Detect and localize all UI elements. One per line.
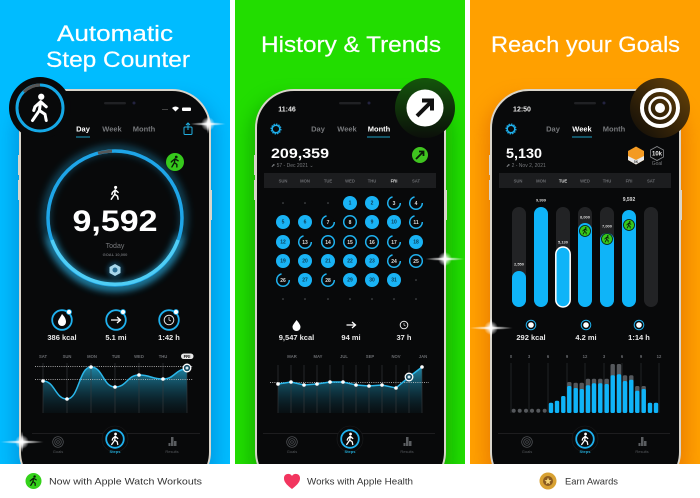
weekday header: WED [345,178,355,184]
calendar grid: 14 [325,240,331,246]
line chart: daily steps [35,363,193,413]
tab bar: Goals [287,449,297,454]
calendar grid: 24 [391,259,397,265]
tabs [76,126,155,138]
stat: distance: 5.1 mi [105,333,127,342]
month labels: JAN [419,354,427,359]
calendar grid: 23 [369,258,375,264]
weekday header: THU [368,178,376,184]
stat: distance [575,320,597,342]
bar chart: weekly steps: 2,550 [514,262,525,266]
tab bar: Steps [345,449,356,454]
panel: reach your goals [469,0,700,498]
calendar grid: 4 [415,201,418,207]
weekday header: MON [536,178,546,184]
hour labels: 3 [603,354,606,359]
stat: distance: 94 mi [341,333,361,342]
panel: automatic step counter [0,0,230,498]
bar chart: weekly steps: 8,000 [580,214,591,220]
tabs: Month [603,124,626,134]
tab bar: Steps [110,449,121,454]
clock: 12:50 [513,106,531,114]
stat: time: 1:14 h [628,333,650,342]
title: history and trends: History & Trends [261,32,441,57]
title: reach your goals: Reach your Goals [491,32,680,57]
icon: settings gear [506,124,516,134]
month labels [288,355,427,358]
weekday labels [39,354,194,359]
phone screen: week view [489,90,682,490]
icon: walker [111,186,118,199]
icon: settings gear [271,124,281,134]
month labels: MAR [287,354,297,359]
stat: time: 1:42 h [158,333,180,342]
hour labels: 6 [547,354,550,359]
hour labels: 9 [640,354,643,359]
weekday header: TUE [324,178,332,184]
weekday labels: THU [159,354,167,359]
stat: distance: 4.2 mi [575,333,597,342]
bar chart: weekly steps [512,197,658,307]
month labels: MAY [314,354,323,359]
month labels: JUL [340,354,348,359]
tabs: Day [76,124,91,134]
progress ring [46,149,184,287]
weekday labels: SUN [63,354,71,359]
month labels: SEP [366,354,374,359]
badge: walker [9,77,66,132]
tab bar [263,426,435,454]
stat: calories: 9,547 kcal [279,333,314,342]
stat: time [396,320,411,340]
caption: earn awards [540,472,618,490]
icon: green arrow [412,147,428,163]
calendar grid: 21 [325,258,331,264]
weekday header: MON [300,178,310,184]
stat: distance [341,322,361,342]
calendar grid: 10 [391,220,397,226]
sparkle right [425,248,465,270]
calendar grid: 1 [349,200,352,206]
calendar grid: 6 [304,220,307,226]
tabs: Day [311,124,326,134]
bar chart: weekly steps: 9,999 [536,198,547,202]
calendar grid: 15 [347,240,353,246]
panel: history and trends [235,0,465,498]
tab bar [32,426,200,454]
calendar grid: 25 [413,259,419,265]
month labels: NOV [391,354,401,359]
icon: 10k goal hexagon: Goal [652,161,662,167]
badge: arrow [395,78,455,138]
icon: 10k goal hexagon: 10k [652,152,663,158]
tabs [546,124,626,138]
badge: target [630,78,690,138]
phone screen: month view [254,90,447,490]
hour labels: 6 [621,354,624,359]
stat: calories: 386 kcal [47,333,77,342]
hour labels: 3 [528,354,531,359]
stat: calories [47,310,77,342]
calendar grid: 19 [280,258,286,264]
sparkle top right [190,116,226,134]
tab bar: Goals [522,449,532,454]
stat: calories: 292 kcal [516,333,546,342]
weekday labels: WED [134,354,144,359]
icon: 5k award hexagon [628,146,644,164]
calendar grid: 9 [371,220,374,226]
calendar grid: 13 [302,240,308,246]
calendar grid: 17 [391,240,397,246]
hour labels: 12 [583,354,588,359]
stat: calories [279,320,314,342]
weekday header: FRI [391,178,397,184]
title: automatic step counter [46,21,190,72]
calendar grid: 30 [369,278,375,284]
calendar grid: 11 [413,220,419,226]
weekday header: SUN [514,178,522,184]
calendar grid: 8 [349,220,352,226]
calendar grid: 28 [325,278,331,284]
icon: 5k award hexagon: 5K [634,160,639,164]
bar chart: weekly steps: 5,130 [558,240,569,244]
weekday header: SAT [412,178,420,184]
tab bar: Results [165,449,179,454]
tabs: Month [133,124,156,134]
tab bar: Goals [53,449,63,454]
weekday header [264,173,436,188]
hour labels: 0 [510,354,513,359]
tab bar [498,426,670,454]
calendar grid: 16 [369,240,375,246]
tabs [312,126,390,138]
caption: apple health [284,474,413,489]
hour labels [510,354,662,359]
weekday header: WED [580,178,590,184]
tab bar: Steps [580,449,591,454]
calendar grid: 27 [302,278,308,284]
icon: 10k goal hexagon [650,146,664,167]
tabs: Month [368,124,391,134]
weekday header: THU [603,178,611,184]
icon: share [184,123,192,134]
stat: calories [516,320,546,342]
status icons [162,106,191,112]
step count: 9,592 [72,205,158,238]
tab bar: Results [400,449,414,454]
weekday labels: MON [87,354,97,359]
icon: green runner [166,153,184,171]
bar chart: weekly steps: 9,592 [623,197,635,203]
weekday labels: TUE [112,354,120,359]
weekday labels: SAT [39,354,47,359]
hour labels: 9 [566,354,569,359]
stat: time: 37 h [396,333,412,342]
title: automatic step counter: Step Counter [46,47,190,72]
weekday labels: FRI [184,354,190,359]
icon: badge hexagon [107,262,123,278]
total steps: 209,359 [271,145,329,161]
weekday header: TUE [559,178,567,184]
date range: ⬈ 57 - Dec 2021 ⌄ [271,163,314,169]
today label: Today [106,243,125,250]
weekday header: SUN [279,178,287,184]
sparkle bottom left [0,431,44,453]
weekday header: FRI [626,178,632,184]
tabs: Week [337,124,358,134]
total steps: 5,130 [506,145,542,161]
title: automatic step counter: Automatic [57,21,173,46]
tabs: Week [102,124,123,134]
calendar grid [276,196,423,300]
calendar grid: 18 [413,240,419,246]
stat: distance [105,310,127,342]
calendar grid: 26 [280,278,286,284]
phone screen: day view [18,90,212,490]
calendar grid: 12 [280,240,286,246]
caption: earn awards: Earn Awards [565,476,618,488]
stat: time [628,320,650,342]
caption: apple health: Works with Apple Health [307,476,413,488]
calendar grid: 29 [347,278,353,284]
date range: ⬈ 2 - Nov 2, 2021 [506,163,546,169]
calendar grid: 5 [282,220,285,226]
tab bar: Results [635,449,649,454]
sparkle left [469,317,513,339]
hour labels: 12 [657,354,662,359]
tabs: Day [546,124,561,134]
calendar grid: 3 [393,201,396,207]
caption: apple watch workouts: Now with Apple Watch Workouts [49,476,202,488]
weekday header [499,173,671,188]
line chart: monthly steps [270,365,429,413]
clock: 11:46 [278,106,296,114]
goal label: GOAL 10,000 [103,252,128,257]
caption: apple watch workouts [26,473,202,489]
tabs: Week [572,124,593,134]
bar chart: hourly steps [511,363,659,413]
stat: time [158,310,180,342]
calendar grid: 22 [347,258,353,264]
calendar grid: 20 [302,258,308,264]
calendar grid: 31 [391,278,397,284]
calendar grid: 7 [327,220,330,226]
bar chart: weekly steps: 7,000 [602,224,613,228]
calendar grid: 2 [371,200,374,206]
weekday header: SAT [647,178,655,184]
